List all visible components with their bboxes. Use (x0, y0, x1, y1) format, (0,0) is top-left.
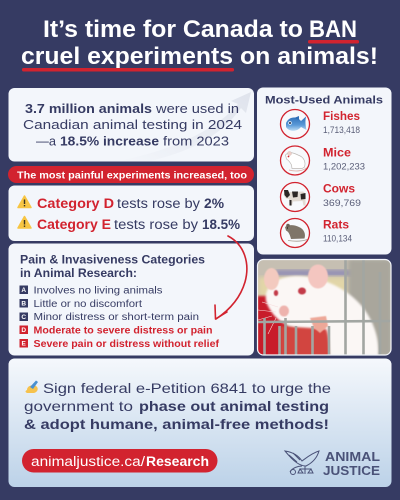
cows row: 369,769 (323, 198, 361, 209)
button: website (22, 449, 218, 472)
panel: category increases: tests rose by (114, 217, 198, 232)
button: website: Research (146, 454, 209, 469)
logo: Animal Justice: JUSTICE (323, 463, 380, 478)
panel: most-used animals: Most-Used Animals (265, 94, 383, 106)
heading: Pain & Invasiveness Categories (20, 254, 205, 266)
category list (20, 286, 220, 350)
title: on animals! (240, 43, 378, 70)
panel: most-used animals (257, 88, 392, 254)
category list: Severe pain or distress without relief (34, 339, 220, 350)
category list: Minor distress or short-term pain (34, 312, 199, 323)
rising arrow watermark (118, 92, 251, 161)
icon: writing hand (26, 380, 38, 393)
panel: category increases: 2% (204, 196, 224, 211)
category list: Involves no living animals (34, 286, 162, 296)
title: BAN (309, 16, 357, 43)
panel: call to action (8, 358, 392, 487)
rats row (280, 218, 352, 248)
cows row (280, 182, 361, 212)
fishes row (280, 110, 360, 138)
panel: headline statistic: Canadian animal testing in 2024 (23, 117, 242, 132)
mice row: Mice (323, 148, 351, 160)
paw (310, 316, 328, 333)
category list: A (21, 287, 26, 294)
title: cruel experiments (21, 43, 233, 70)
fishes row: 1,713,418 (323, 125, 360, 136)
category list: Moderate to severe distress or pain (34, 326, 212, 336)
category list: Little or no discomfort (34, 299, 142, 310)
title: It’s time for Canada to (43, 16, 303, 43)
icon: warning E (18, 216, 31, 228)
panel: headline statistic: were used in (155, 101, 239, 116)
red bedding (257, 296, 287, 356)
category list: E (22, 341, 27, 348)
logo: Animal Justice: ANIMAL (325, 449, 380, 464)
category list: D (21, 327, 26, 334)
whiskers (258, 302, 278, 334)
category list: C (21, 314, 26, 321)
rats row: Rats (323, 220, 349, 232)
heading (20, 254, 205, 280)
fishes row: Fishes (323, 111, 360, 123)
ears (264, 268, 279, 290)
mice row: 1,202,233 (323, 162, 365, 172)
icon: warning D (18, 196, 31, 208)
panel: category increases: Category D (37, 196, 114, 211)
arrow: category E to list (215, 236, 247, 319)
logo: Animal Justice (285, 449, 380, 478)
panel: headline statistic: —a (36, 134, 57, 148)
heading: in Animal Research: (20, 268, 137, 280)
cage bars (258, 259, 392, 355)
button: website: animaljustice.ca/ (31, 454, 145, 469)
rats row: 110,134 (323, 234, 352, 244)
banner: most painful experiments: The most painful experiments increased, too (17, 169, 247, 181)
rat body and head (266, 276, 378, 356)
panel: category increases: 18.5% (202, 217, 240, 232)
eyes and nose (274, 290, 278, 296)
category list: B (21, 301, 26, 308)
mice row (280, 146, 365, 175)
panel: headline statistic: 18.5% increase (60, 134, 159, 148)
panel: call to action: & adopt humane, animal-free methods! (24, 416, 329, 432)
panel: headline statistic (8, 88, 254, 162)
panel: call to action: phase out animal testing (139, 398, 329, 414)
cows row: Cows (323, 184, 355, 196)
panel: call to action: government to (24, 398, 133, 414)
panel: category increases (8, 186, 254, 241)
panel: headline statistic: 3.7 million animals (25, 101, 152, 116)
panel: category increases: tests rose by (117, 196, 200, 211)
panel: headline statistic: from 2023 (163, 134, 229, 148)
panel: call to action: Sign federal e-Petition 6841 to urge the (43, 380, 331, 396)
banner: most painful experiments (8, 166, 254, 183)
photo frame (258, 260, 391, 355)
panel: pain and invasiveness categories (8, 244, 254, 356)
panel: category increases: Category E (37, 217, 111, 232)
photo: white rat in cage (257, 259, 392, 356)
title (21, 16, 378, 72)
